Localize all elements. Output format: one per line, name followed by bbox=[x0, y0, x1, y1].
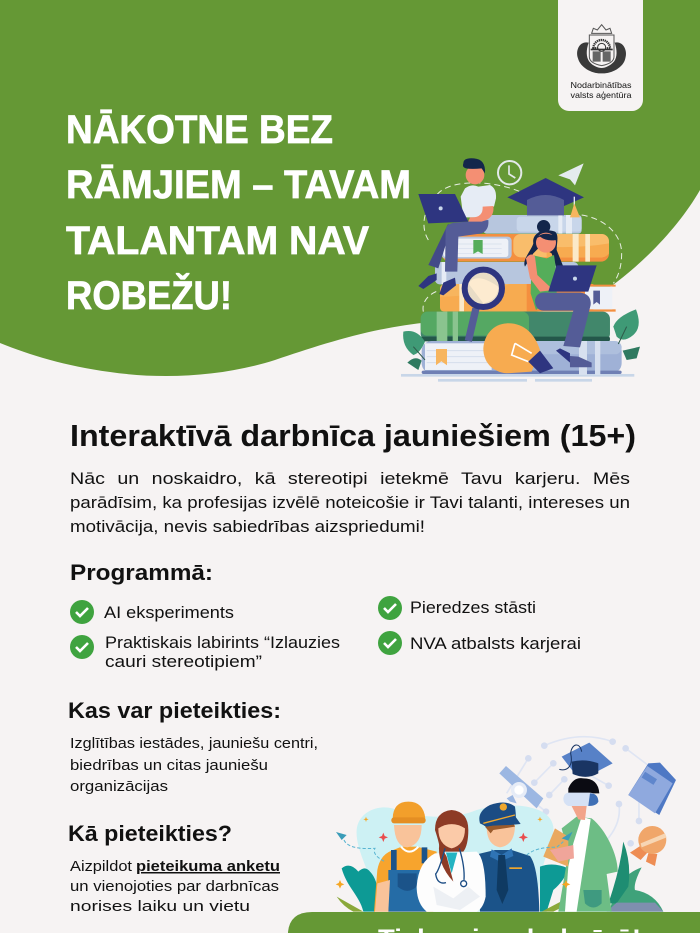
worker bbox=[374, 802, 437, 912]
shoes bbox=[556, 348, 570, 363]
item: AI eksperiments: AI eksperiments bbox=[104, 603, 234, 622]
title: TALANTAM NAV bbox=[66, 219, 369, 263]
illustration: professions bbox=[336, 737, 676, 912]
leaves bbox=[403, 309, 640, 370]
VR student bbox=[543, 778, 618, 912]
who can apply text: organizācijas bbox=[70, 778, 168, 795]
item: NVA atbalsts: NVA atbalsts karjerai bbox=[410, 634, 581, 653]
how to apply text bbox=[70, 858, 280, 915]
laptop bbox=[548, 265, 597, 292]
dashed orbit bbox=[423, 183, 622, 312]
logo text: Nodarbinātības bbox=[570, 81, 632, 90]
item: NVA atbalsts bbox=[378, 631, 581, 655]
item: labirints: Praktiskais labirints “Izlauzies bbox=[105, 633, 340, 652]
green header background bbox=[0, 0, 700, 376]
man with laptop bbox=[418, 158, 496, 295]
legs bbox=[428, 223, 449, 268]
who can apply text bbox=[70, 735, 318, 795]
item: AI eksperiments bbox=[70, 600, 234, 624]
magnifying glass bbox=[465, 270, 502, 341]
main heading: Interaktīvā darbnīca jauniešiem (15+) bbox=[70, 418, 636, 453]
laptop bbox=[418, 194, 468, 223]
icon: coat of arms bbox=[577, 25, 626, 73]
head bbox=[466, 166, 484, 184]
clock bbox=[498, 161, 521, 184]
legs bbox=[535, 293, 591, 347]
title: NĀKOTNE BEZ bbox=[66, 108, 333, 152]
torso bbox=[531, 255, 557, 310]
diploma bbox=[499, 766, 543, 808]
paper plane bbox=[558, 163, 584, 185]
item: Pieredzes stāsti bbox=[378, 596, 536, 620]
programme heading: Programmā: bbox=[70, 560, 213, 585]
title: ROBEŽU! bbox=[66, 272, 232, 318]
graduation cap blue bbox=[559, 743, 613, 777]
book stack bbox=[421, 215, 622, 375]
item: labirints: cauri stereotipiem” bbox=[105, 652, 262, 671]
how to apply heading: Kā pieteikties? bbox=[68, 821, 232, 846]
police officer bbox=[478, 803, 539, 912]
torso bbox=[461, 185, 496, 217]
doctor bbox=[417, 810, 486, 912]
title bbox=[66, 108, 411, 318]
intro paragraph: parādīsim, ka profesijas izvēlē noteicošie ir Tavi talanti, intereses un bbox=[70, 493, 630, 512]
intro paragraph bbox=[70, 469, 630, 536]
who can apply text: Izglītības iestādes, jauniešu centri, bbox=[70, 735, 318, 752]
ground lines bbox=[401, 374, 634, 382]
book bbox=[628, 763, 676, 815]
title: RĀMJIEM – TAVAM bbox=[66, 163, 411, 207]
logo text bbox=[570, 81, 632, 100]
how to apply text: Aizpildot bbox=[70, 858, 133, 875]
blue book bbox=[435, 262, 578, 284]
illustration: students on books bbox=[401, 158, 640, 382]
intro paragraph: motivācija, nevis sabiedrības aizspriedumi! bbox=[70, 517, 425, 536]
plants bbox=[337, 842, 663, 912]
light bulb bbox=[483, 323, 553, 373]
programme list bbox=[70, 596, 581, 671]
logo card bbox=[558, 0, 643, 111]
sparkles and arrows bbox=[336, 817, 573, 889]
how to apply text: un vienojoties par darbnīcas bbox=[70, 878, 279, 895]
intro paragraph: Nāc un noskaidro, kā stereotipi ietekmē Tavu karjeru. Mēs bbox=[70, 469, 630, 488]
green book bbox=[421, 312, 610, 341]
graduation cap bbox=[507, 178, 584, 217]
bottom banner bbox=[288, 912, 700, 933]
logo text: valsts aģentūra bbox=[570, 91, 632, 100]
hair bbox=[537, 220, 550, 233]
woman with laptop bbox=[524, 220, 597, 367]
light blue blob bbox=[357, 805, 553, 912]
how to apply text: norises laiku un vietu bbox=[70, 898, 250, 915]
medal bbox=[630, 826, 667, 866]
shoes bbox=[418, 273, 437, 289]
who can apply text: biedrības un citas jauniešu bbox=[70, 757, 268, 774]
head bbox=[536, 233, 556, 253]
item: labirints bbox=[70, 633, 340, 671]
top book bbox=[483, 215, 582, 234]
network background bbox=[507, 737, 657, 847]
who can apply heading: Kas var pieteikties: bbox=[68, 698, 281, 723]
bottom book bbox=[422, 341, 622, 373]
orange book bbox=[442, 234, 609, 262]
item: Pieredzes stāsti: Pieredzes stāsti bbox=[410, 598, 536, 617]
how to apply text: pieteikuma anketu bbox=[136, 858, 280, 875]
orange book two bbox=[440, 284, 547, 311]
